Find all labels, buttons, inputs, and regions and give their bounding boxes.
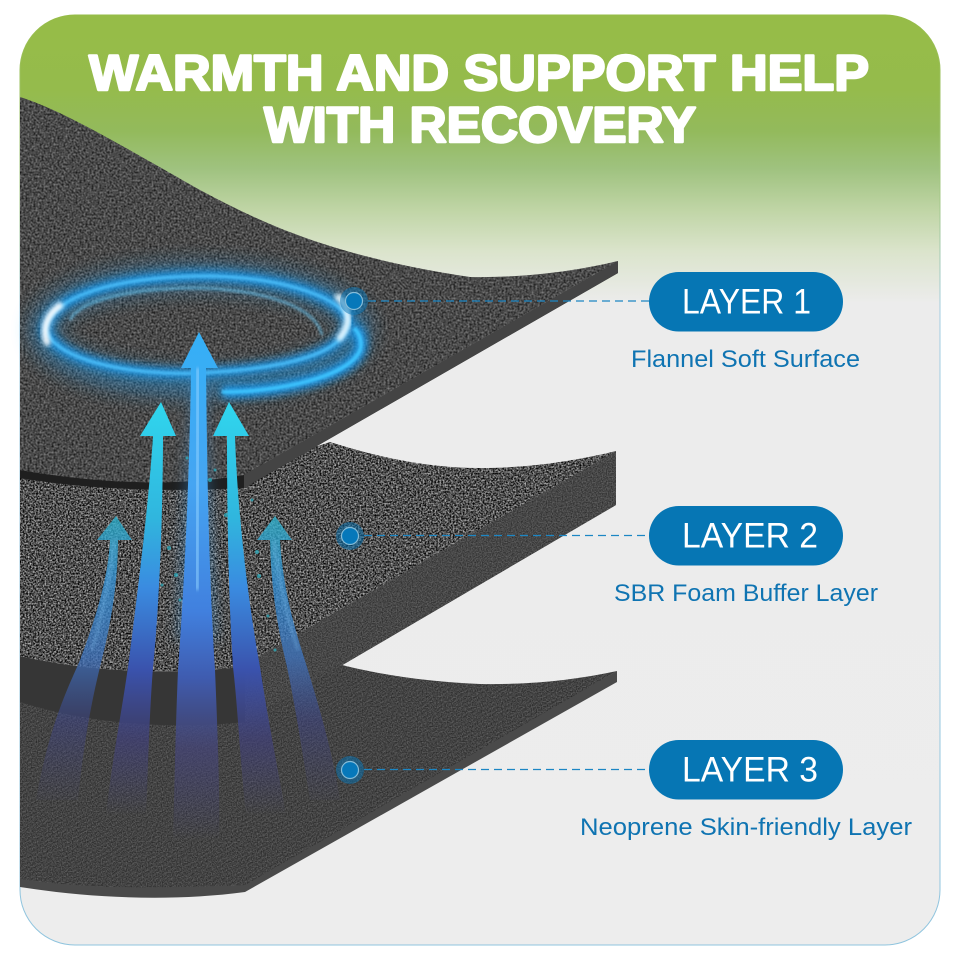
foam layers stack <box>20 90 620 898</box>
heat arrows rising through layers <box>36 332 340 840</box>
callout: layer 2: SBR Foam Buffer Layer <box>614 580 878 607</box>
title: WITH RECOVERY <box>264 97 696 153</box>
heat ring glow <box>42 276 361 392</box>
callout: layer 3: Neoprene Skin-friendly Layer <box>580 814 912 841</box>
title: WARMTH AND SUPPORT HELP <box>89 45 869 101</box>
arrow highlights on outer shafts <box>92 540 298 650</box>
layer 1: flannel sheet <box>20 90 620 490</box>
arrow: centre <box>173 332 219 840</box>
callout: layer 2 <box>336 506 878 607</box>
callout: layer 1: LAYER 1 <box>682 282 811 322</box>
callout: layer 3: LAYER 3 <box>682 750 818 790</box>
arrow: inner left <box>106 402 176 815</box>
layer 2: SBR foam sheet <box>20 440 620 725</box>
callout: layer 1 <box>340 272 860 373</box>
layer 3: neoprene sheet <box>20 660 620 898</box>
callout: layer 1: Flannel Soft Surface <box>631 346 860 373</box>
callout: layer 3 <box>336 740 912 841</box>
heat particles <box>160 456 276 652</box>
arrow: outer right <box>257 516 340 800</box>
arrow: outer left <box>36 516 132 800</box>
title <box>89 45 869 153</box>
arrow: inner right <box>213 402 286 815</box>
callout: layer 2: LAYER 2 <box>682 516 818 556</box>
